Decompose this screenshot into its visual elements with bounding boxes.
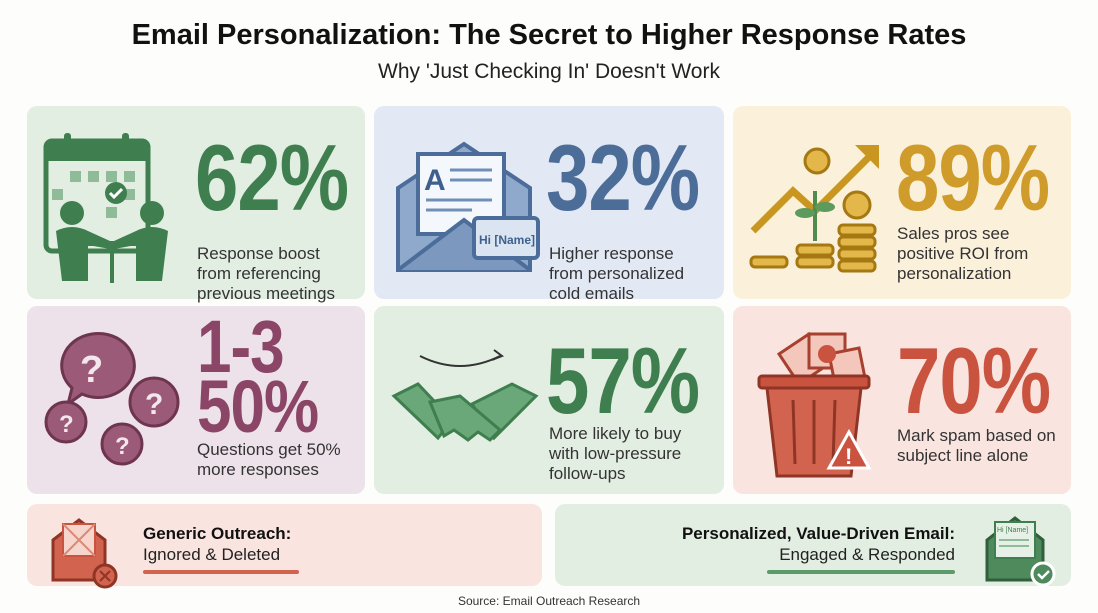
description — [897, 224, 1028, 283]
description: More likely to buy — [549, 424, 681, 443]
panel: 32% — [374, 106, 724, 299]
description: from referencing — [197, 264, 321, 283]
stat: 57% — [546, 328, 699, 434]
icon: question bubbles: ? — [145, 388, 163, 421]
description — [549, 424, 682, 483]
panel: personalized email: Engaged & Responded — [779, 545, 955, 564]
icon: calendar meeting — [44, 133, 168, 283]
panel: 62% — [27, 106, 365, 299]
panel: 1-3 50% — [27, 306, 365, 494]
icon: approved envelope — [986, 516, 1056, 586]
icon: coins growth — [750, 145, 879, 272]
subtitle: Why 'Just Checking In' Doesn't Work — [378, 60, 720, 83]
description: cold emails — [549, 284, 634, 303]
icon: email envelope: Hi [Name] — [479, 233, 535, 247]
icon: email envelope: A — [424, 164, 446, 197]
description — [197, 440, 341, 479]
description: with low-pressure — [549, 444, 681, 463]
source: Source: Email Outreach Research — [458, 594, 640, 608]
description: Response boost — [197, 244, 320, 263]
description: follow-ups — [549, 464, 626, 483]
icon: question bubbles: ? — [80, 349, 103, 391]
stat — [197, 306, 318, 449]
label: Personalized, Value-Driven Email: — [682, 524, 955, 543]
stat: 32% — [546, 125, 699, 231]
icon: rejected envelope — [52, 518, 118, 588]
description: Questions get 50% — [197, 440, 341, 459]
description — [549, 244, 684, 303]
description: previous meetings — [197, 284, 335, 303]
panel: 57% — [374, 306, 724, 494]
stat: 62% — [195, 125, 348, 231]
description: from personalized — [549, 264, 684, 283]
icon: handshake — [392, 349, 538, 442]
label: Generic Outreach: — [143, 524, 291, 543]
description: positive ROI from — [897, 244, 1028, 263]
description: subject line alone — [897, 446, 1028, 465]
icon: trash with emails — [758, 332, 872, 478]
description: Mark spam based on — [897, 426, 1056, 445]
panel: personalized email — [555, 504, 1071, 586]
icon: question bubbles: ? — [115, 433, 130, 460]
stat: 70% — [897, 328, 1050, 434]
icon: email envelope — [396, 142, 540, 272]
description: Higher response — [549, 244, 674, 263]
panel: 70% — [733, 306, 1071, 494]
icon: approved envelope: Hi [Name] — [997, 527, 1028, 534]
title: Email Personalization: The Secret to Higher Response Rates — [132, 19, 966, 51]
panel: generic outreach — [27, 504, 542, 586]
description: Sales pros see — [897, 224, 1009, 243]
description: personalization — [897, 264, 1011, 283]
description: more responses — [197, 460, 319, 479]
icon: trash with emails: ! — [845, 444, 852, 469]
stat: 1-3 — [197, 306, 284, 389]
description — [897, 426, 1056, 465]
icon: question bubbles — [44, 332, 180, 466]
stat: 89% — [896, 125, 1049, 231]
panel: generic outreach: Ignored & Deleted — [143, 545, 280, 564]
icon: question bubbles: ? — [59, 411, 74, 438]
panel: 89% — [733, 106, 1071, 299]
description — [197, 244, 335, 303]
stat: 50% — [197, 366, 318, 449]
